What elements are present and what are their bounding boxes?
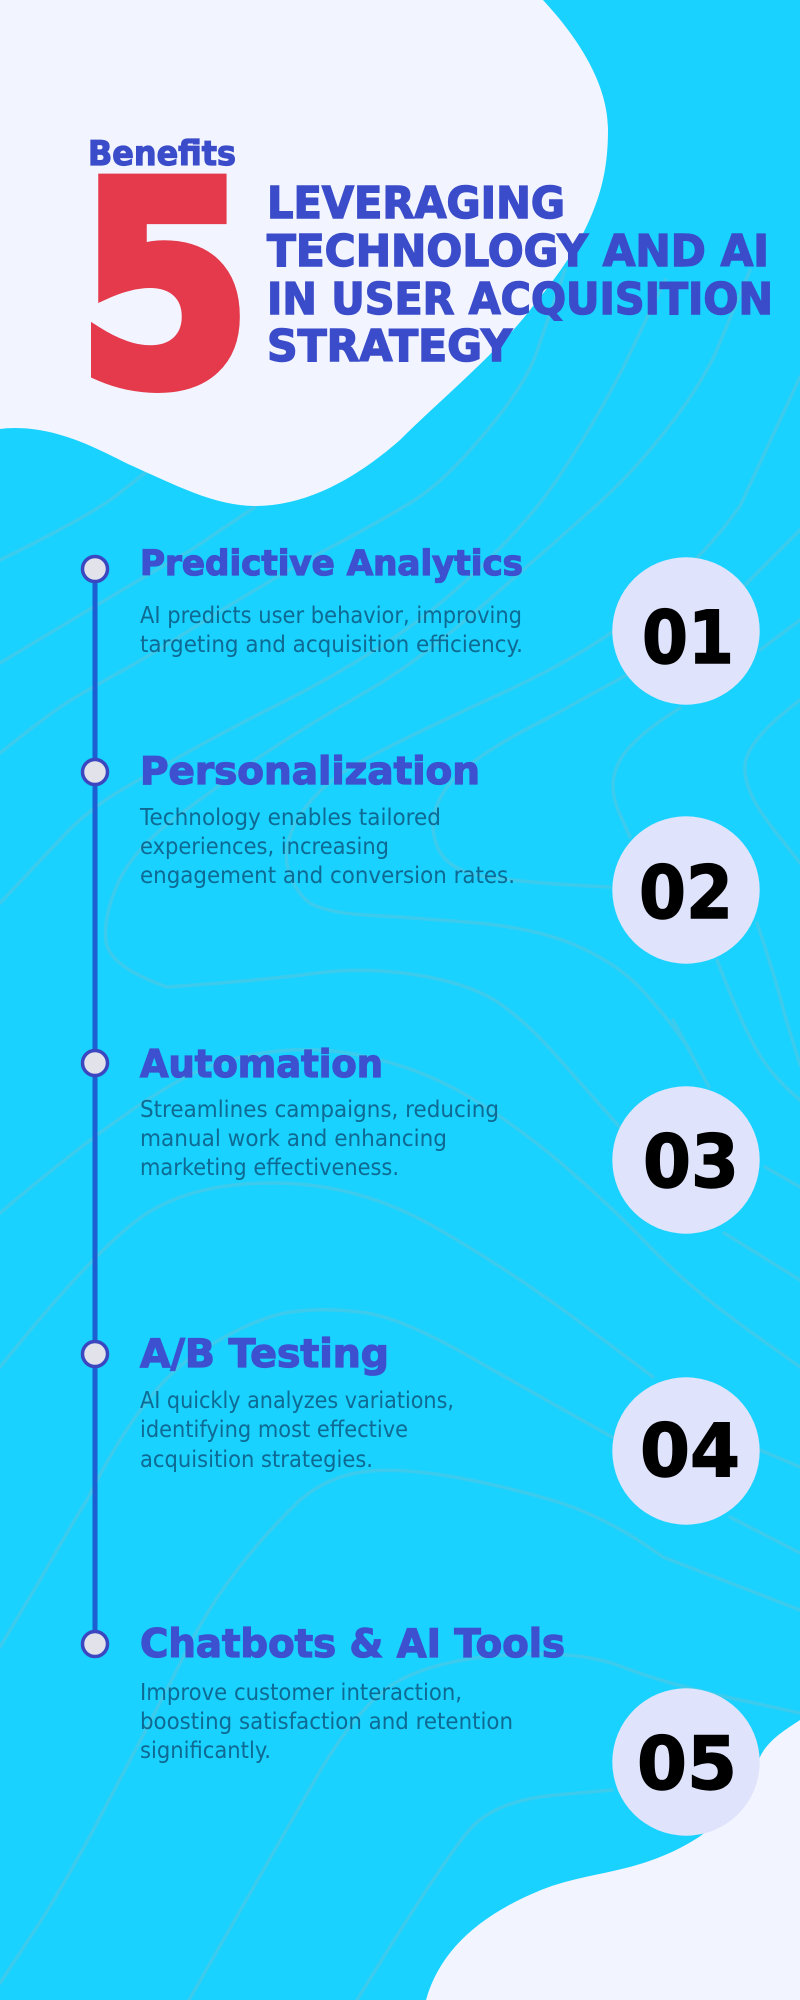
number badge 03 — [612, 1086, 760, 1234]
description 5 — [140, 1680, 513, 1764]
background blob: bottom right — [426, 1720, 800, 2000]
background blob: top left — [0, 0, 608, 506]
number badge 01 — [612, 557, 760, 705]
heading 3: Automation — [140, 1042, 383, 1086]
big number 5: 5 — [77, 124, 252, 449]
marker 2 — [82, 760, 108, 784]
headline: LEVERAGING — [267, 178, 565, 229]
description 4: identifying most effective — [140, 1417, 408, 1443]
number badge 02 — [612, 816, 760, 964]
description 1: targeting and acquisition efficiency. — [140, 632, 523, 658]
marker 4 — [82, 1342, 108, 1366]
description 2: experiences, increasing — [140, 834, 389, 860]
marker 3 — [82, 1050, 108, 1076]
description 3: manual work and enhancing — [140, 1126, 447, 1152]
heading 2: Personalization — [140, 749, 480, 793]
marker 1 — [82, 556, 108, 582]
timeline line — [92, 569, 98, 1644]
headline — [267, 178, 773, 372]
item 2: Personalization — [82, 749, 760, 964]
description 3 — [140, 1097, 499, 1181]
heading 5: Chatbots & AI Tools — [140, 1622, 565, 1667]
headline: TECHNOLOGY AND AI — [267, 226, 769, 277]
description 3: marketing effectiveness. — [140, 1155, 399, 1181]
description 4 — [140, 1388, 454, 1473]
description 1 — [140, 603, 523, 658]
headline: STRATEGY — [267, 321, 513, 372]
description 2: Technology enables tailored — [139, 805, 441, 831]
item 5: Chatbots and AI Tools — [82, 1622, 760, 1836]
number badge 01: 01 — [642, 596, 734, 681]
eyebrow: Benefits: Benefits — [88, 134, 236, 174]
number badge 05 — [612, 1688, 760, 1836]
description 5: significantly. — [140, 1738, 271, 1764]
marker 5 — [82, 1632, 108, 1656]
heading 4: A/B Testing — [140, 1332, 389, 1377]
heading 1: Predictive Analytics — [140, 544, 523, 584]
number badge 03: 03 — [643, 1120, 739, 1205]
item 4: A/B Testing — [82, 1332, 760, 1525]
description 5: Improve customer interaction, — [140, 1680, 462, 1706]
description 2 — [139, 805, 515, 889]
description 1: AI predicts user behavior, improving — [140, 603, 522, 629]
number badge 04: 04 — [640, 1409, 740, 1494]
headline: IN USER ACQUISITION — [267, 274, 773, 325]
number badge 05: 05 — [637, 1722, 737, 1807]
number badge 02: 02 — [639, 851, 733, 936]
description 4: acquisition strategies. — [140, 1447, 373, 1473]
item 1: Predictive Analytics — [82, 544, 760, 705]
description 4: AI quickly analyzes variations, — [140, 1388, 454, 1414]
number badge 04 — [612, 1377, 760, 1525]
description 5: boosting satisfaction and retention — [140, 1709, 513, 1735]
title block — [77, 124, 773, 449]
description 3: Streamlines campaigns, reducing — [140, 1097, 499, 1123]
item 3: Automation — [82, 1042, 760, 1234]
description 2: engagement and conversion rates. — [140, 863, 515, 889]
